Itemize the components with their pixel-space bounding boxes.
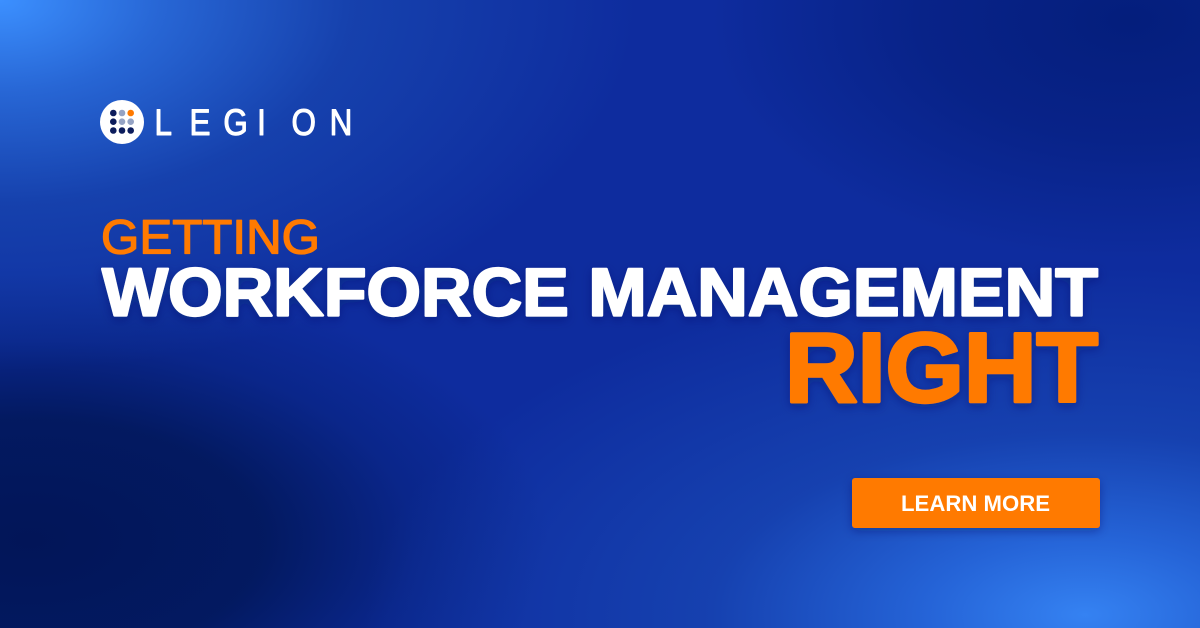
button: Learn More: LEARN MORE	[901, 491, 1050, 516]
icon: Legion logo mark	[100, 100, 144, 144]
heading line: GETTING: GETTING	[101, 212, 320, 264]
heading line: RIGHT: RIGHT	[785, 312, 1098, 422]
heading line: WORKFORCE MANAGEMENT: WORKFORCE MANAGEMENT	[102, 254, 1098, 330]
logo wordmark: LEGION	[155, 103, 352, 144]
button: Learn More	[852, 478, 1100, 528]
